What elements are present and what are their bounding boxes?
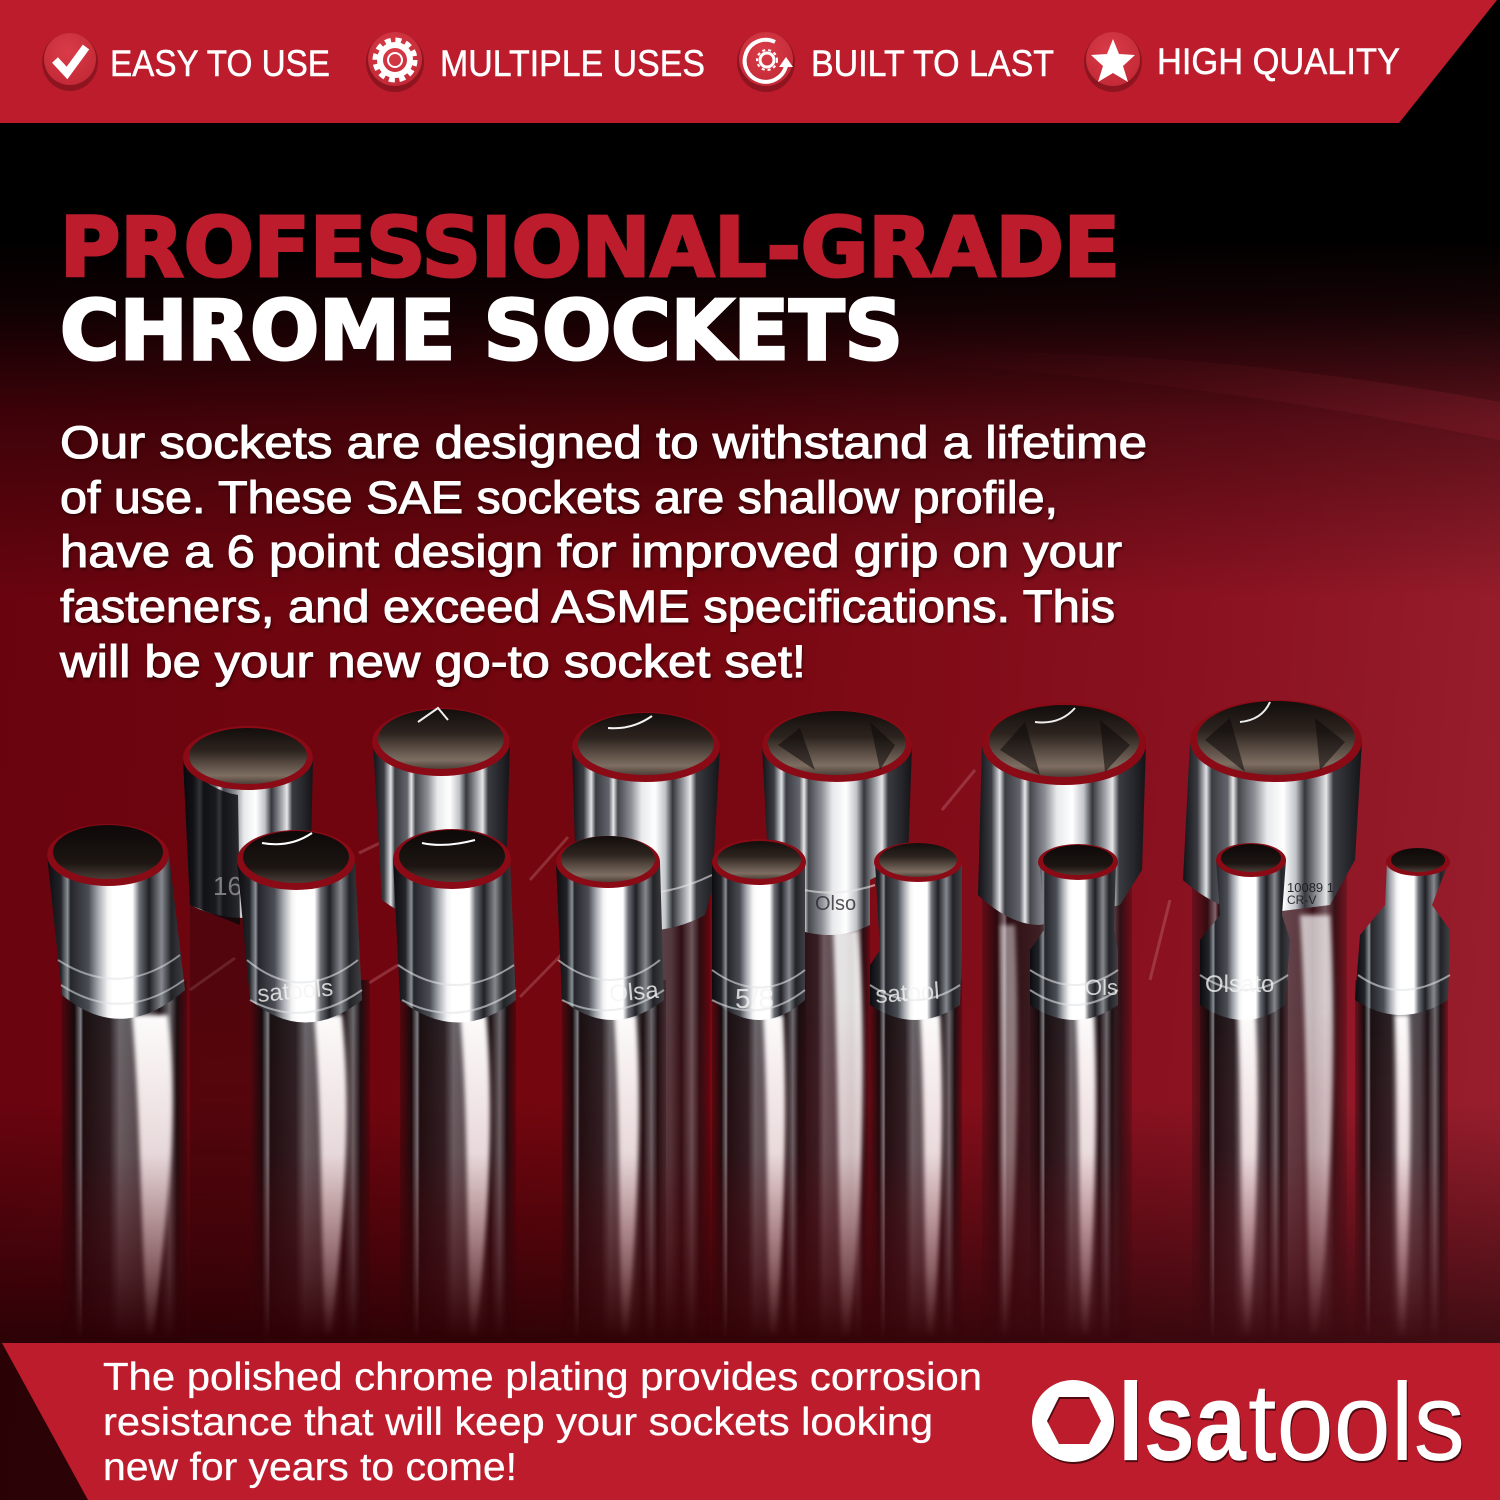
- engraved marking: 10089 1: [1287, 880, 1334, 895]
- engraved logo: Olsato: [1205, 971, 1274, 998]
- label: EASY TO USE: [110, 43, 330, 84]
- icon: star: [1084, 32, 1142, 92]
- engraved logo: Olso: [815, 893, 856, 915]
- icon: gear: [366, 32, 424, 92]
- label: MULTIPLE USES: [440, 43, 705, 84]
- socket back 5: [978, 703, 1146, 925]
- socket front 9: [1355, 848, 1450, 1015]
- socket back 4: [762, 710, 912, 935]
- engraved steel grade: CR-V: [1287, 893, 1316, 907]
- top banner: [0, 0, 1497, 123]
- engraved logo: satools: [256, 974, 334, 1008]
- badge: easy to use: [42, 33, 330, 91]
- headline line 1: PROFESSIONAL-GRADE: [60, 201, 1120, 296]
- socket back 6: [1183, 700, 1362, 915]
- body paragraph: [59, 417, 1147, 687]
- engraved logo: Olsa: [608, 977, 660, 1008]
- footer text: The polished chrome plating provides corrosion: [103, 1356, 982, 1399]
- logo: Olsatools: tools: [1248, 1361, 1465, 1484]
- footer text: resistance that will keep your sockets looking: [103, 1401, 933, 1444]
- socket reflections on the table: [62, 860, 1448, 1340]
- icon: cycle gear: [737, 32, 795, 92]
- body paragraph: have a 6 point design for improved grip on your: [60, 526, 1122, 577]
- socket front 8: [1200, 843, 1290, 1020]
- logo hex O: [1032, 1380, 1114, 1462]
- body paragraph: Our sockets are designed to withstand a lifetime: [60, 417, 1147, 468]
- back row sockets: [183, 700, 1362, 935]
- socket back 2: [372, 708, 510, 924]
- socket front 5: [712, 839, 806, 1020]
- socket front 3: [393, 829, 516, 1022]
- label: BUILT TO LAST: [811, 43, 1054, 84]
- icon: check mark: [42, 33, 98, 91]
- socket back 3: [572, 712, 720, 930]
- body paragraph: of use. These SAE sockets are shallow profile,: [60, 472, 1058, 523]
- badge: built to last: [737, 32, 1054, 92]
- logo: Olsatools: [1032, 1361, 1465, 1484]
- engraved logo: Ols: [1085, 975, 1118, 1000]
- socket front 2: [237, 830, 362, 1022]
- front row sockets: [47, 824, 1450, 1022]
- socket front 7: [1030, 844, 1118, 1020]
- badge: high quality: [1084, 32, 1400, 92]
- surface highlight arc: [900, 352, 1500, 440]
- headline: [60, 201, 1120, 379]
- surface scratches: [190, 730, 1170, 997]
- engraved size: 16: [213, 871, 242, 901]
- headline line 2: CHROME SOCKETS: [60, 284, 903, 379]
- body paragraph: fasteners, and exceed ASME specifications. This: [60, 581, 1115, 632]
- badge: multiple uses: [366, 32, 705, 92]
- socket back 1: [183, 726, 313, 925]
- footer text: [103, 1356, 982, 1489]
- logo wordmark: lsa: [1118, 1361, 1247, 1484]
- engraved logo: satool: [875, 978, 940, 1009]
- bottom banner: [2, 1343, 1500, 1500]
- bright reflection cores: [132, 915, 1410, 1335]
- body paragraph: will be your new go-to socket set!: [59, 636, 806, 687]
- footer text: new for years to come!: [103, 1446, 517, 1489]
- socket front 6: [870, 842, 962, 1020]
- socket front 1: [47, 824, 185, 1019]
- socket front 4: [556, 836, 664, 1020]
- engraved size: 5/8: [735, 983, 774, 1014]
- label: HIGH QUALITY: [1157, 41, 1400, 82]
